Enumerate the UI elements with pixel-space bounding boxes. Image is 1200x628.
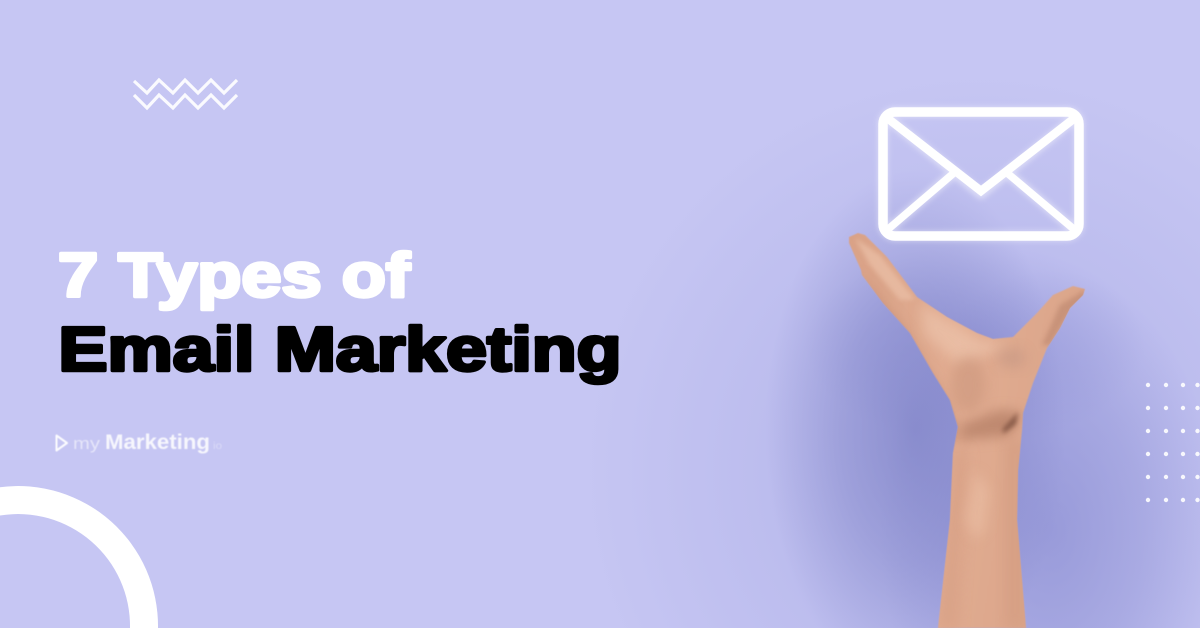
title line 2: Email Marketing	[58, 316, 622, 384]
logo: myMarketing.io: my	[73, 434, 101, 453]
title	[58, 242, 622, 384]
logo: myMarketing.io	[56, 431, 222, 454]
icon: zigzag decoration	[134, 80, 237, 108]
icon: logo play triangle	[56, 436, 67, 450]
title line 1: 7 Types of	[58, 242, 410, 310]
logo: myMarketing.io: Marketing	[105, 431, 210, 454]
decorative ring	[0, 486, 158, 628]
hand and arm	[849, 233, 1085, 628]
logo: myMarketing.io: io	[213, 441, 222, 452]
icon: glowing envelope	[883, 112, 1079, 236]
icon: dot grid	[1146, 383, 1200, 502]
